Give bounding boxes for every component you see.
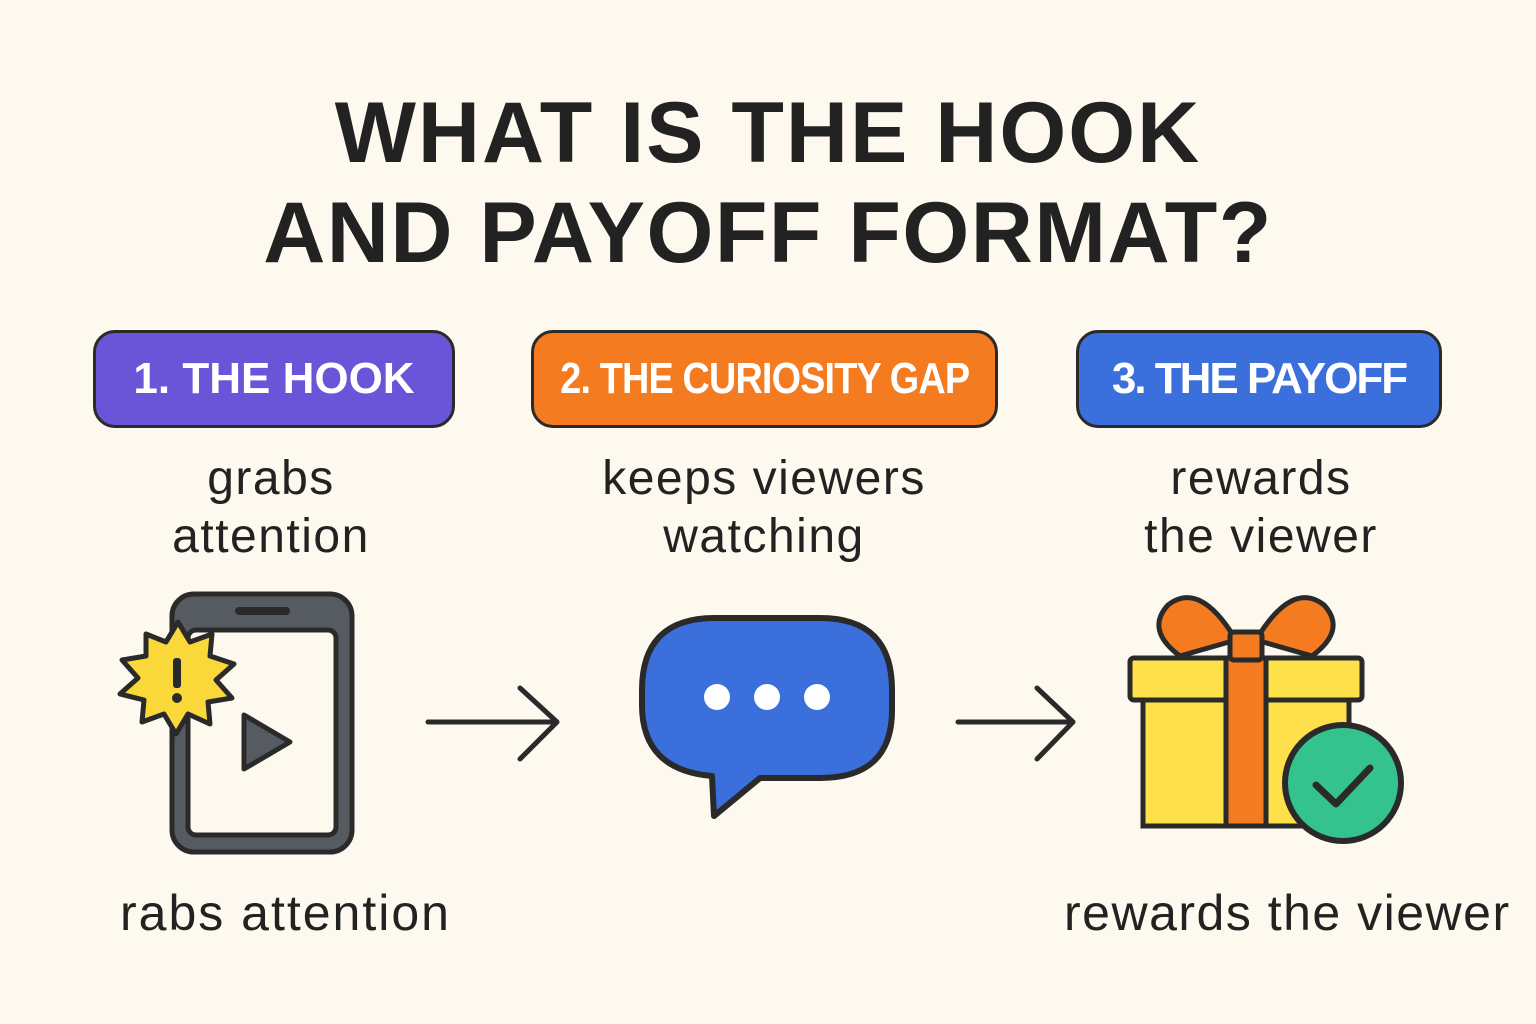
title	[263, 85, 1273, 281]
text: keeps viewers watching: watching	[663, 510, 865, 563]
pill: 1. the hook	[93, 330, 455, 428]
icon: speech bubble	[639, 615, 895, 819]
text: grabs attention: attention	[172, 510, 370, 563]
text: rewards the viewer: the viewer	[1144, 510, 1378, 563]
pill: 3. the payoff	[1076, 330, 1442, 428]
text: grabs attention: grabs	[207, 452, 335, 505]
arrow 2	[956, 686, 1076, 762]
text: rewards the viewer	[1144, 452, 1378, 563]
pill: 1. the hook: 1. THE HOOK	[133, 354, 415, 403]
text: keeps viewers watching: keeps viewers	[602, 452, 926, 505]
title: WHAT IS THE HOOK	[335, 85, 1201, 181]
icon: phone with alert	[118, 592, 354, 854]
arrow 1	[426, 686, 560, 762]
pill: 2. the curiosity gap	[531, 330, 998, 428]
pill: 3. the payoff: 3. THE PAYOFF	[1112, 354, 1406, 403]
text: rabs attention: rabs attention	[120, 885, 451, 941]
title: AND PAYOFF FORMAT?	[263, 185, 1273, 281]
pill: 2. the curiosity gap: 2. THE CURIOSITY GAP	[560, 354, 969, 403]
text: keeps viewers watching	[602, 452, 926, 563]
text: rewards the viewer (bottom): rewards the viewer	[1064, 885, 1511, 941]
icon: gift with check	[1128, 595, 1404, 844]
text: rewards the viewer: rewards	[1170, 452, 1352, 505]
text: grabs attention	[172, 452, 370, 563]
